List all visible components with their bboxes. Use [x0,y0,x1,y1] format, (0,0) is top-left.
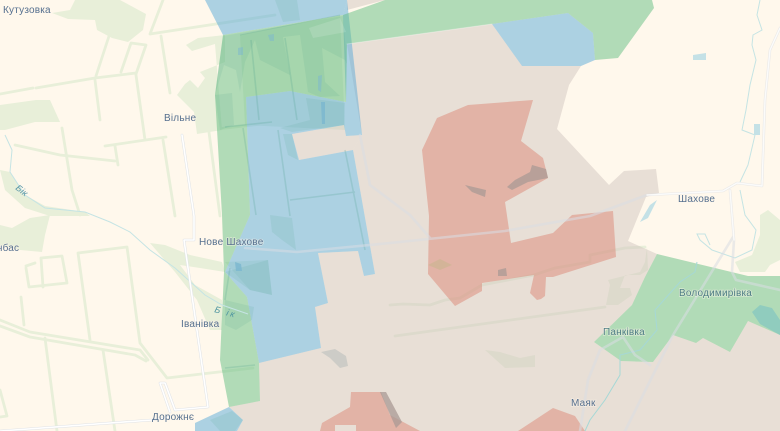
label: Pankivka: Панківка [603,327,645,338]
green liberated territory [215,0,780,407]
label: Kutuzivka: Кутузовка [3,5,51,16]
label: Volodymyrivka: Володимирівка [679,288,752,299]
beige occupied territory [229,0,780,431]
river label: Bik upper: Бік [14,183,30,199]
light field patches in green [309,18,346,38]
label: Maiak: Маяк [571,398,596,409]
blue contested territory [195,0,595,431]
label: Ivanivka: Іванівка [181,319,220,330]
label: Nove Shakhove: Нове Шахове [199,237,264,248]
darker forest under overlays [210,0,365,431]
dark patches in red zone [380,165,548,428]
label: Shakhove: Шахове [678,194,715,205]
label: Vilne: Вільне [164,113,196,124]
river label: Bik lower: Б ік [213,304,238,320]
label: Dorozhnie: Дорожнє [152,412,194,423]
red zones [320,100,616,431]
